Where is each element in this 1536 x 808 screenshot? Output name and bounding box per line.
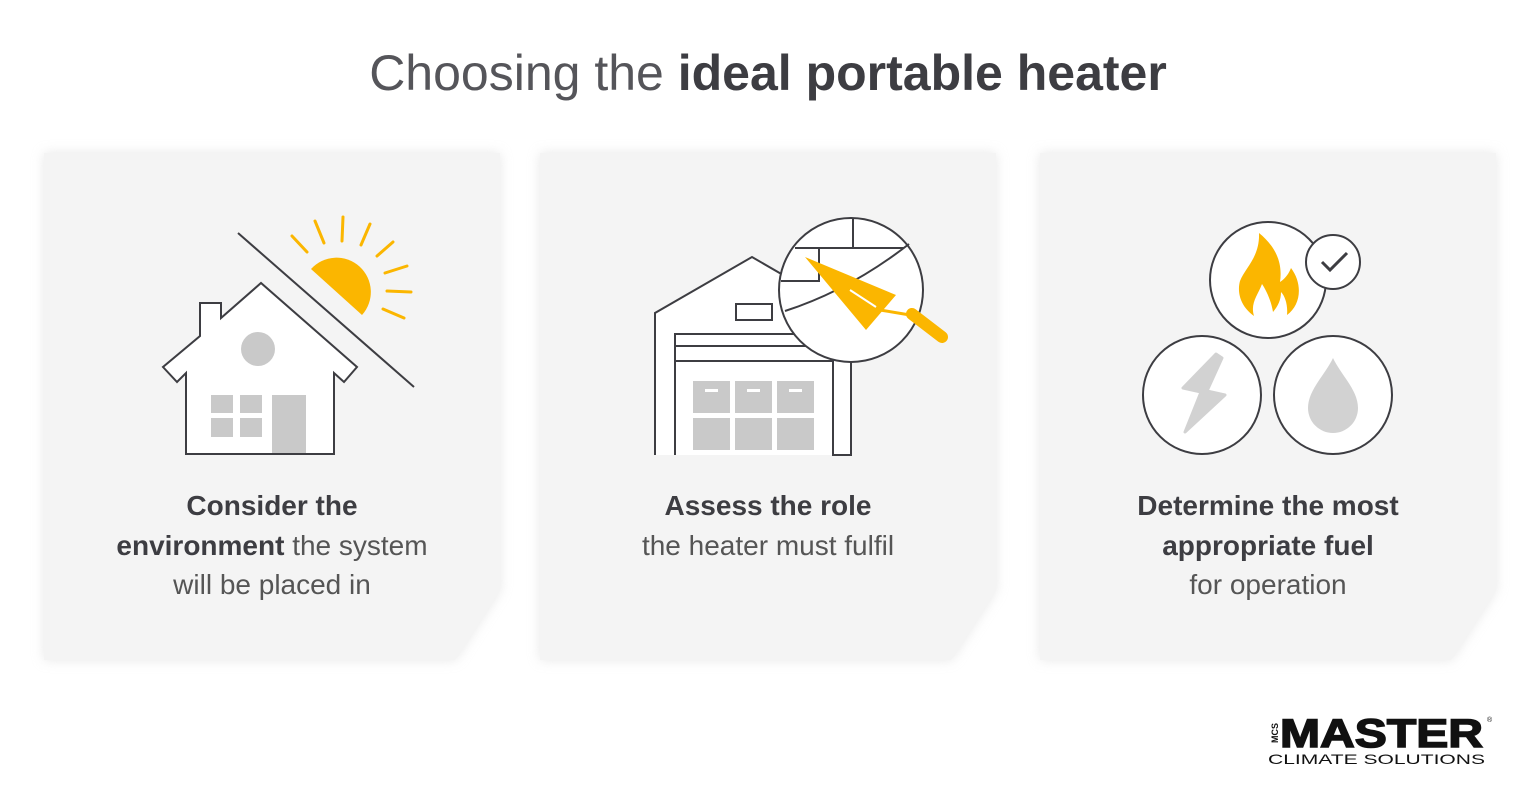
title: Choosing the ideal portable heater [369,45,1167,101]
logo: MASTER [1280,712,1483,756]
text: role: the heater must fulfil [642,530,894,561]
text: environment: environment the system [116,530,428,561]
icon: fuel choices [1143,222,1392,454]
panel: fuel [1040,153,1496,660]
text: role: Assess the role [664,490,872,521]
logo: ® [1487,716,1493,724]
logo: MCS [1270,723,1280,743]
logo [1268,712,1493,767]
text: fuel: for operation [1189,569,1347,600]
icon: garage with trowel [655,218,923,455]
panel: role [540,153,996,660]
text: fuel: Determine the most [1137,490,1399,521]
logo: CLIMATE SOLUTIONS [1268,751,1485,767]
panel: environment [44,153,500,660]
text: fuel: appropriate fuel [1162,530,1374,561]
text: environment: will be placed in [172,569,371,600]
icon: house with sun [163,217,414,454]
text: environment: Consider the [186,490,358,521]
